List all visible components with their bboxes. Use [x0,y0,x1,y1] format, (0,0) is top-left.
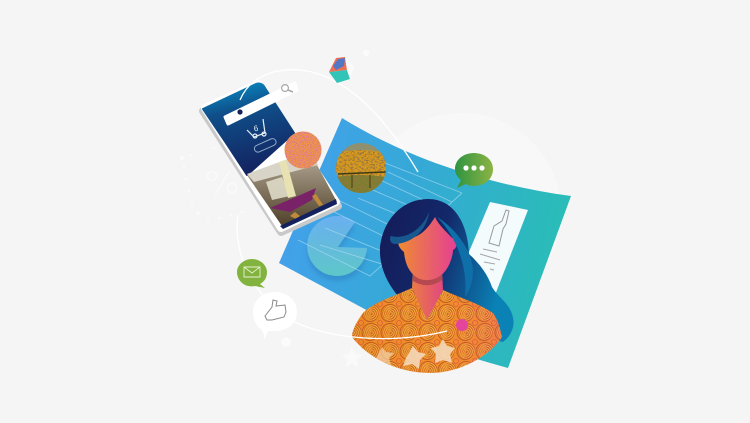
hair [380,199,514,342]
orange texture circle [284,132,322,168]
orbit arcs [237,70,447,339]
shirt [352,288,502,373]
icon: cart: 6 [253,124,259,133]
face [398,217,457,280]
dot [281,337,291,347]
icon: cart [247,119,266,138]
hair strand [390,212,429,244]
icon: cube [329,57,354,83]
form lines [298,163,462,276]
document panel [279,118,571,368]
wine label card [455,202,528,295]
speech bubble: chat [455,153,493,188]
vineyard photo circle [336,143,386,193]
dot [363,50,369,56]
speech bubble: mail [237,259,267,288]
icon: envelope [244,267,260,277]
icon: thumb [265,300,286,320]
screen [203,84,294,175]
badge [456,319,468,331]
background circle [363,113,561,311]
percent sign and dots [180,147,243,222]
button [253,137,277,153]
star outside shirt [342,347,362,367]
pie chart [307,216,367,281]
woman [352,199,514,373]
photo: wine glasses [247,150,337,229]
neck [412,270,443,320]
search bar [225,83,297,124]
icon: magnifier [282,85,288,91]
speech bubble: thumbs up [253,292,297,340]
stars [376,347,394,366]
icon: wine bottle [489,210,509,246]
illustration [199,57,571,373]
phone [203,83,338,232]
